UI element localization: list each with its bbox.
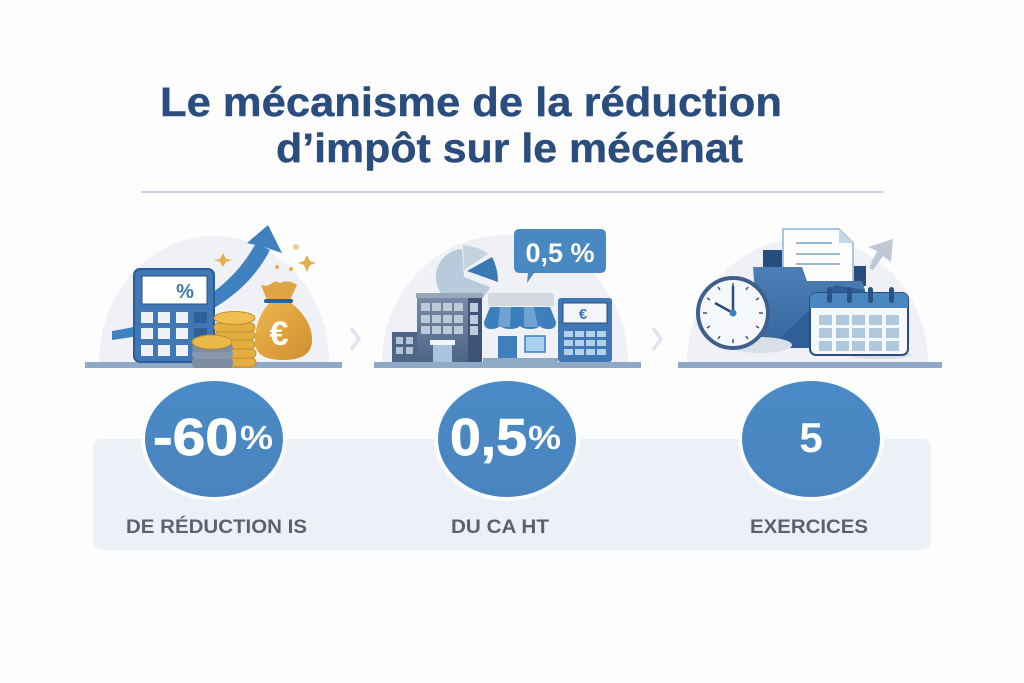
icon: calendar [810,287,912,359]
icon: calculator: % [176,281,194,303]
icon: gray arrow [868,239,893,270]
illustration: buildings, pie chart, speech bubble and calculator [374,229,641,368]
title: d’impôt sur le mécénat [276,125,743,171]
icon: money bag: € [270,315,289,353]
label: exercices: EXERCICES [750,517,868,538]
icon: calculator with euro [558,298,612,362]
stat: -60 % [141,377,287,501]
icon: folder with document [753,229,866,348]
stat: -60 %: -60 [153,409,238,467]
icon: growth arrow [112,225,282,340]
icon: sparkles [214,244,316,272]
stat: -60 %: % [240,419,273,456]
label: du CA HT: DU CA HT [451,517,549,538]
stat: 5 [738,377,884,501]
label: de réduction IS: DE RÉDUCTION IS [126,516,307,538]
icon: office building [392,293,483,362]
icon: pie chart [436,245,498,305]
stat: 0,5 % [434,377,580,501]
illustration: calculator, growth arrow, coins and money bag [85,225,342,368]
arrow: chevron 1 [351,328,359,350]
title: Le mécanisme de la réduction [160,79,782,125]
icon: clock [698,278,792,353]
panel: stats background [93,439,931,550]
stat: 5: 5 [799,414,823,461]
callout: speech bubble: 0,5 % [525,238,595,268]
stat: 0,5 %: 0,5 [450,409,527,467]
title [160,79,782,171]
icon: shop [483,293,558,362]
icon: calculator [134,269,214,362]
illustration: clock, folder, document and calendar [678,229,942,368]
icon: gold coin stack [214,312,256,367]
stat: 0,5 %: % [528,419,561,456]
callout: speech bubble [514,229,606,283]
icon: calculator with euro: € [579,306,588,323]
icon: money bag [255,281,312,360]
icon: gray coin stack [192,335,233,368]
arrow: chevron 2 [653,328,661,350]
